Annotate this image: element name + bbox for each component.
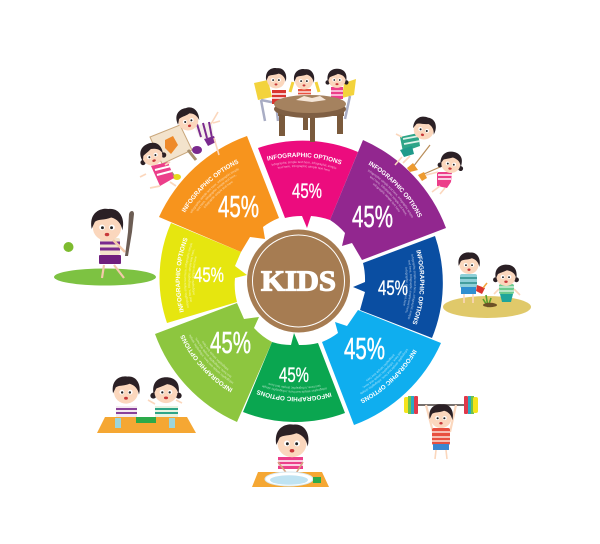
label: orange heading and body: Infographic simple text here: [204, 181, 233, 208]
label: lime heading and body: Infographic simple text here, infographic simple: [189, 334, 234, 384]
label: green heading and body: text here, Infographic simple text here: [268, 383, 320, 390]
illustration: boy lifting barbell: [404, 396, 478, 459]
label: cyan heading and body: INFOGRAPHIC OPTIONS: [360, 350, 417, 403]
label: green heading and body: INFOGRAPHIC OPTIONS: [256, 390, 332, 402]
label: yellow heading and body: [176, 238, 197, 312]
label: purple heading and body: Infographic simple text here, infographic simple: [368, 170, 413, 218]
label: cyan heading and body: Infographic simple text here, infographic simple: [360, 349, 408, 394]
label: magenta heading and body: text here, Infographic simple text here: [278, 164, 330, 172]
percent: cyan: 45%: [344, 331, 385, 366]
illustration: kids drawing at easel: [135, 105, 220, 188]
segment: yellow: [160, 223, 247, 323]
percent: blue: 45%: [378, 277, 408, 300]
segment: lime: [155, 303, 272, 422]
label: blue heading and body: [403, 250, 424, 324]
percent: green: 45%: [279, 364, 309, 387]
label: lime heading and body: INFOGRAPHIC OPTIONS: [180, 335, 233, 392]
illustration: kids at round table: [254, 68, 356, 142]
label: blue heading and body: Infographic simple text here, infographic simple: [408, 254, 416, 320]
label: lime heading and body: text here, Infographic simple text here,: [196, 337, 232, 378]
illustration: kids brushing teeth: [97, 376, 196, 433]
percent: yellow: 45%: [194, 264, 224, 287]
percent: orange: 45%: [218, 189, 259, 224]
illustration: kids gardening: [443, 252, 531, 318]
segment: cyan: [322, 310, 441, 425]
percent: lime: 45%: [210, 325, 251, 360]
segment: orange: [159, 136, 279, 252]
segment: blue: [353, 236, 443, 338]
center badge: KIDS: [247, 230, 350, 332]
label: cyan heading and body: text here, Infographic simple text here,: [362, 351, 402, 388]
label: blue heading and body: INFOGRAPHIC OPTIONS: [412, 250, 424, 324]
label: purple heading and body: INFOGRAPHIC OPTIONS: [368, 161, 422, 218]
label: purple heading and body: Infographic simple text here: [372, 183, 400, 212]
label: yellow heading and body: text here, Infographic simple text here,: [188, 250, 196, 302]
label: blue heading and body: text here, Infographic simple text here,: [405, 260, 412, 313]
label: magenta heading and body: INFOGRAPHIC OPTIONS: [266, 152, 342, 164]
label: lime heading and body: Infographic simple text here: [202, 341, 228, 370]
illustration: kid washing hands: [252, 424, 329, 487]
percent: purple: 45%: [352, 199, 393, 234]
segment: magenta: [258, 141, 358, 228]
label: purple heading and body: text here, Infographic simple text here,: [370, 176, 406, 216]
label: yellow heading and body: Infographic simple text here, infographic simple: [184, 243, 192, 308]
illustration: kids sweeping: [395, 114, 466, 194]
label: orange heading and body: INFOGRAPHIC OPTIONS: [182, 160, 238, 212]
center badge: KIDS: KIDS: [261, 266, 336, 298]
label: blue heading and body: Infographic simple text here: [403, 268, 408, 306]
label: magenta heading and body: Infographic simple text here, infographic simple: [272, 160, 336, 170]
illustration: boy with baseball bat: [54, 209, 156, 286]
segment: green: [243, 333, 345, 422]
label: orange heading and body: text here, Infographic simple text here,: [196, 174, 236, 212]
segment: purple: [330, 140, 446, 260]
label: orange heading and body: Infographic simple text here, infographic simple: [190, 168, 239, 214]
label: green heading and body: Infographic simple text here, infographic simple: [262, 385, 327, 394]
label: yellow heading and body: Infographic simple text here: [192, 256, 197, 295]
label: cyan heading and body: Infographic simple text here: [366, 354, 395, 382]
label: yellow heading and body: INFOGRAPHIC OPTIONS: [176, 238, 188, 312]
percent: magenta: 45%: [292, 180, 322, 203]
